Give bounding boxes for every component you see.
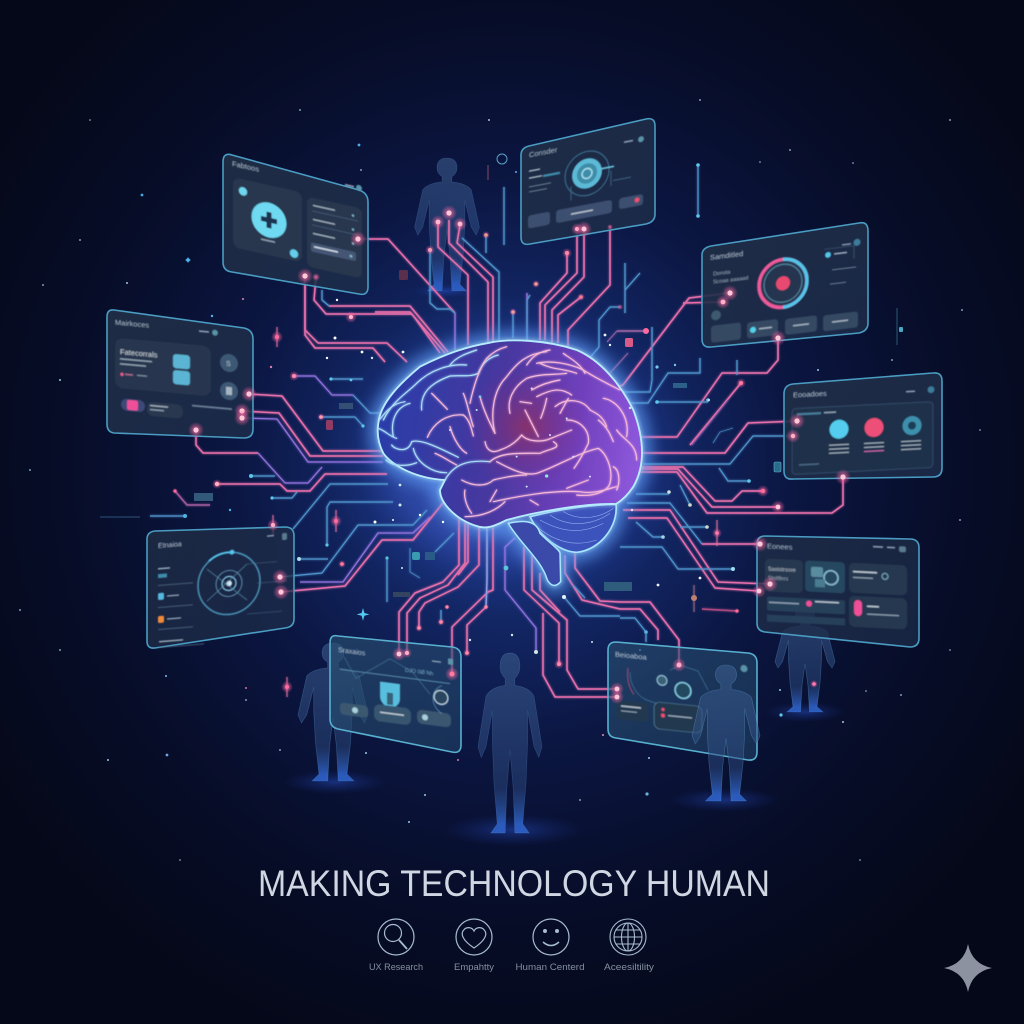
panel content: health: Fabtoos: [232, 159, 259, 174]
panel content: bottom center: [338, 644, 453, 731]
panel: right upper: [702, 223, 868, 347]
panel content: bottom center: DJO 0Ø Nh: [405, 668, 433, 677]
icon: empathy: [456, 919, 492, 955]
panel content: right lower: Stoltfers: [768, 576, 788, 583]
label: Empathy: Empahtty: [454, 962, 494, 973]
pink glowing nodes: [172, 205, 851, 704]
brain glow: [378, 340, 642, 585]
person: top figure: [415, 158, 479, 291]
cyan and white nodes: [183, 163, 783, 717]
panel content: bottom center: Sraxaios: [338, 647, 366, 658]
icon: accessibility globe: [610, 919, 646, 955]
person: bottom right figure: [692, 665, 760, 801]
brain stem: [508, 521, 561, 585]
panel content: right: [792, 383, 934, 475]
brain halo: [320, 295, 700, 615]
panel: left lower: [147, 527, 294, 648]
small floating widgets: [100, 154, 903, 597]
brain sparkles: [399, 387, 591, 488]
panel content: left dashboard: S: [226, 361, 231, 368]
panel content: right lower: Saoistrsore: [768, 567, 796, 574]
panel content: right lower: Eonees: [767, 542, 793, 552]
pink traces: [175, 220, 843, 697]
sulci: warm centre and right: [427, 347, 637, 517]
floor glows: [283, 284, 845, 846]
circuit traces: [150, 165, 843, 697]
title: MAKING TECHNOLOGY HUMAN: [258, 863, 770, 904]
panel content: health: [232, 157, 362, 279]
panel: health: [223, 154, 368, 294]
vertical sparkle ticks: [273, 327, 717, 697]
panel content: right upper: Donsta: [713, 269, 731, 278]
panel content: top center: Consder: [529, 145, 558, 159]
person: right figure: [775, 607, 835, 712]
panel content: bottom right: [615, 650, 748, 738]
panel content: bottom right: Beioaboa: [615, 650, 647, 662]
panel content: left lower: Etnaioa: [158, 541, 182, 550]
panel: bottom center: [330, 636, 461, 752]
panel: right: [784, 373, 942, 479]
person: bottom left figure: [298, 643, 368, 781]
label: Human Centerd: Human Centerd: [516, 962, 584, 973]
panel: top center: [521, 119, 655, 244]
circuit nodes: [172, 163, 851, 717]
panel content: right upper: Scoaa aaaaad: [713, 275, 748, 286]
blue traces: [150, 165, 793, 642]
panel content: left dashboard: Fatecorrals: [120, 347, 158, 360]
panel: right lower: [757, 536, 919, 647]
panel content: left lower: [158, 533, 287, 648]
purple traces: [242, 293, 536, 652]
panel content: right upper: [710, 235, 861, 345]
panel content: right lower: [765, 539, 907, 630]
label: UX Research: UX Research: [369, 962, 423, 973]
panel content: left dashboard: [115, 318, 238, 424]
label: Accessibility: Aceesiltility: [604, 962, 654, 973]
person: center figure: [478, 653, 542, 833]
icon: sparkle watermark: [944, 944, 992, 992]
background star particles: [19, 99, 981, 861]
panel content: right: Eooadoes: [793, 389, 827, 400]
panel content: right upper: Samditled: [710, 249, 743, 262]
cerebrum: [378, 340, 642, 527]
panel: bottom right: [608, 642, 757, 760]
icon: UX research: [378, 919, 414, 955]
cerebellum: [530, 504, 616, 552]
panel content: left dashboard: Mairkoces: [115, 318, 149, 330]
panel: left dashboard: [107, 310, 253, 438]
icon: human centered: [533, 919, 569, 955]
brain: [378, 340, 642, 585]
sulci: cool left: [378, 350, 498, 480]
icon row: [369, 919, 654, 973]
